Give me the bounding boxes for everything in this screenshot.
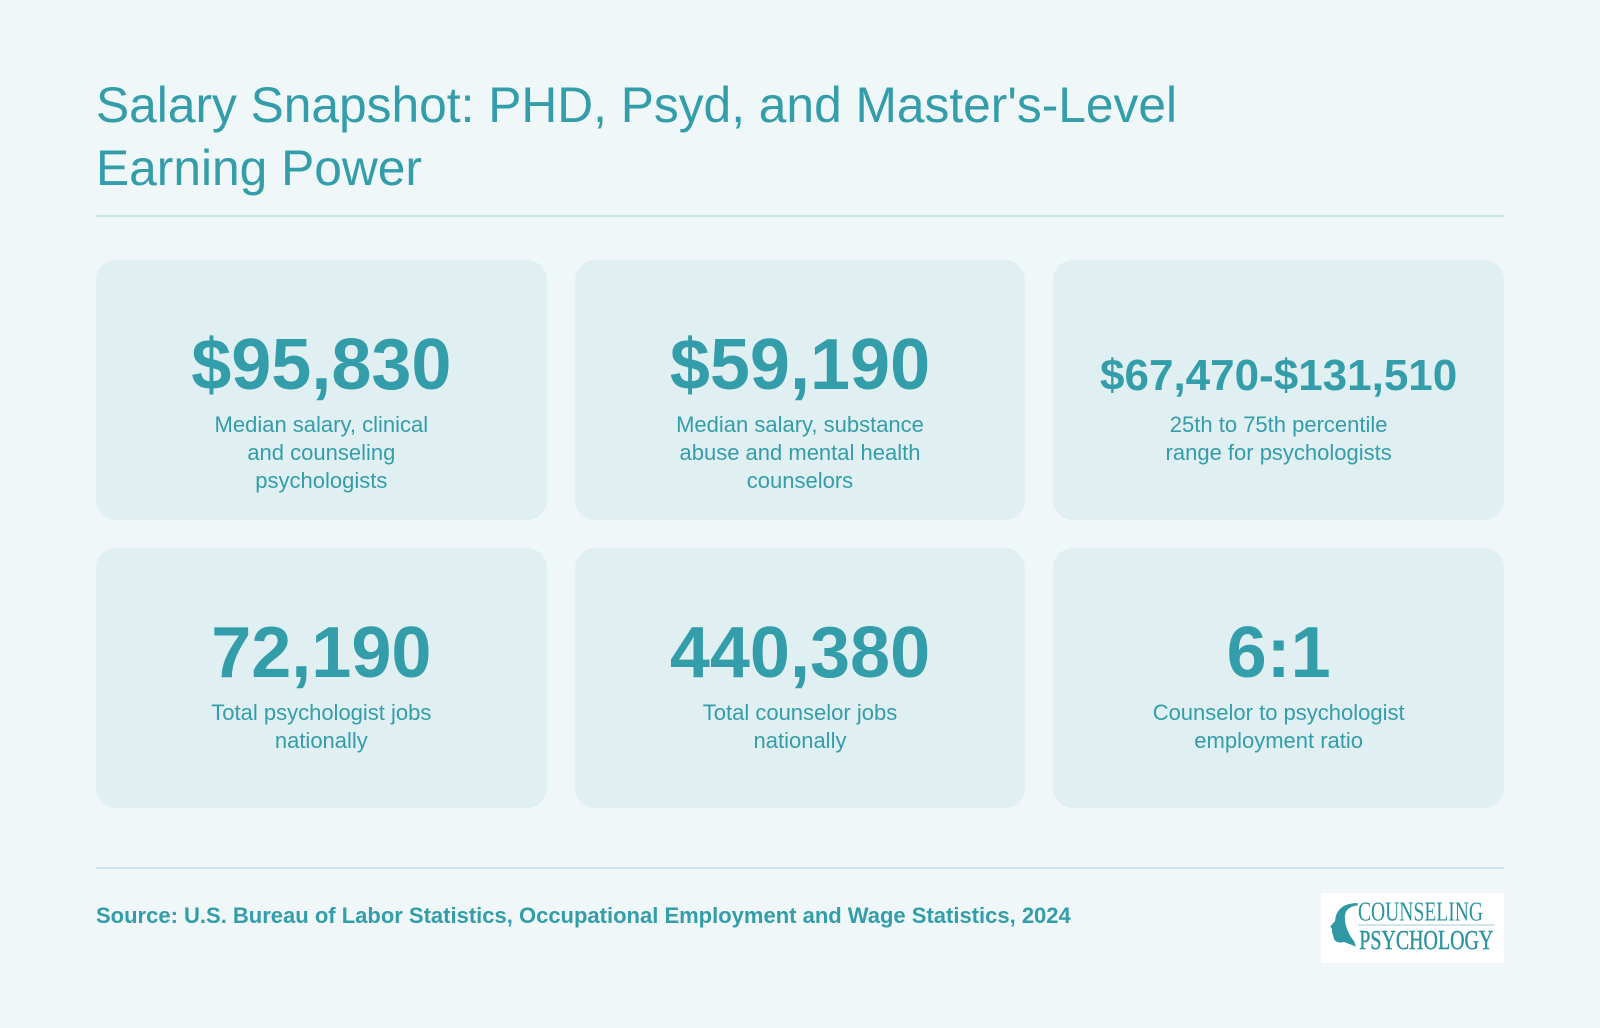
stat label: Total psychologist jobs [211,700,431,725]
panel: median salary counselors [575,260,1025,520]
panel: total counselor jobs [575,548,1025,808]
stat label: Median salary, clinical [215,412,428,437]
stat label: psychologists [255,468,387,493]
stat label: and counseling [247,440,395,465]
stat label: Counselor to psychologist [1153,700,1405,725]
stat label [676,412,924,493]
panel: percentile range [1053,260,1504,520]
stat value: $67,470-$131,510 [1100,351,1457,400]
title: Salary Snapshot: PHD, Psyd, and Master's-Level [96,77,1177,133]
logo wordmark [1358,897,1495,955]
stat value: $95,830 [191,325,451,405]
stat value: 72,190 [211,613,431,693]
stat label: counselors [747,468,853,493]
panel: median salary psychologists [96,260,547,520]
stat label: employment ratio [1194,728,1363,753]
stat value: $59,190 [670,325,930,405]
stat label [703,700,897,753]
stat label: nationally [275,728,368,753]
stat label: abuse and mental health [680,440,920,465]
stat label: Total counselor jobs [703,700,897,725]
panel: employment ratio [1053,548,1504,808]
stat label [211,700,431,753]
stat label [1166,412,1392,465]
title [96,77,1177,196]
panel: total psychologist jobs [96,548,547,808]
stat label: nationally [754,728,846,753]
stat value: 440,380 [670,613,930,693]
stat label: Median salary, substance [676,412,924,437]
icon: head silhouette [1330,903,1358,946]
logo: counseling psychology [1321,893,1504,963]
stat label [1153,700,1405,753]
stat label: range for psychologists [1166,440,1392,465]
stat label [215,412,428,493]
title: Earning Power [96,140,422,196]
stat label: 25th to 75th percentile [1170,412,1388,437]
source text: Source: U.S. Bureau of Labor Statistics, Occupational Employment and Wage Statistics, 2024 [96,903,1071,928]
stat value: 6:1 [1227,613,1331,693]
